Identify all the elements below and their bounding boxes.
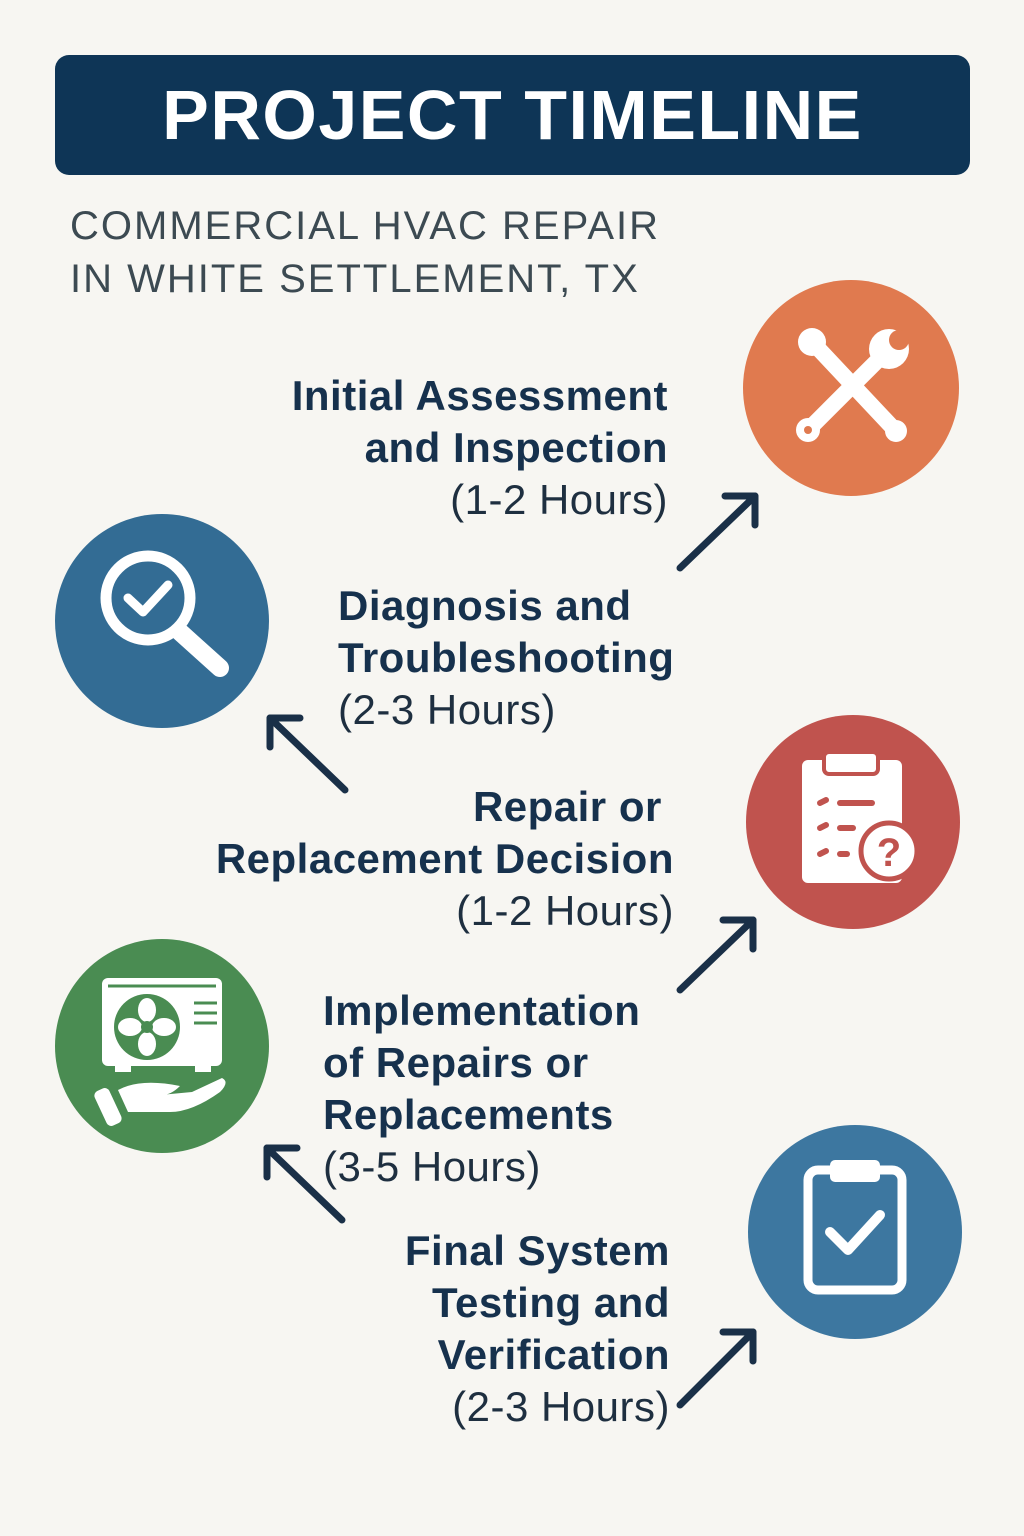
icon: clipboard check [748,1125,962,1339]
step 3 text: Repair or [473,783,662,830]
step 5 text: (2-3 Hours) [452,1383,670,1430]
step 4 text: Implementation [323,987,640,1034]
arrow 4 [267,1148,342,1220]
subtitle: COMMERCIAL HVAC REPAIR [70,204,660,248]
arrow 2 [270,718,345,790]
step 2 text: (2-3 Hours) [338,686,556,733]
step 5 text: Final System [405,1227,670,1274]
step 4 text: (3-5 Hours) [323,1143,541,1190]
step 1 text [292,372,668,523]
icon: AC unit in hand [55,939,269,1153]
arrow 1 [680,496,755,568]
arrow 3 [680,920,753,990]
step 3 text [216,783,674,934]
arrow 5 [680,1332,753,1405]
step 4 text: Replacements [323,1091,614,1138]
step 5 text [405,1227,670,1430]
step 1 text: Initial Assessment [292,372,668,419]
step 4 text: of Repairs or [323,1039,589,1086]
step 2 text: Diagnosis and [338,582,632,629]
icon: clipboard question: ? [877,831,901,875]
step 3 text: (1-2 Hours) [456,887,674,934]
step 2 text [338,582,674,733]
step 5 text: Testing and [432,1279,670,1326]
icon: magnifier check [55,514,269,728]
step 1 text: and Inspection [365,424,668,471]
subtitle: IN WHITE SETTLEMENT, TX [70,257,640,301]
step 5 text: Verification [438,1331,670,1378]
step 4 text [323,987,640,1190]
step 3 text: Replacement Decision [216,835,674,882]
title bar [55,55,970,175]
subtitle [70,204,660,301]
icon: clipboard question [746,715,960,929]
step 2 text: Troubleshooting [338,634,674,681]
title bar: PROJECT TIMELINE [162,76,863,154]
step 1 text: (1-2 Hours) [450,476,668,523]
icon: tools [743,280,959,496]
